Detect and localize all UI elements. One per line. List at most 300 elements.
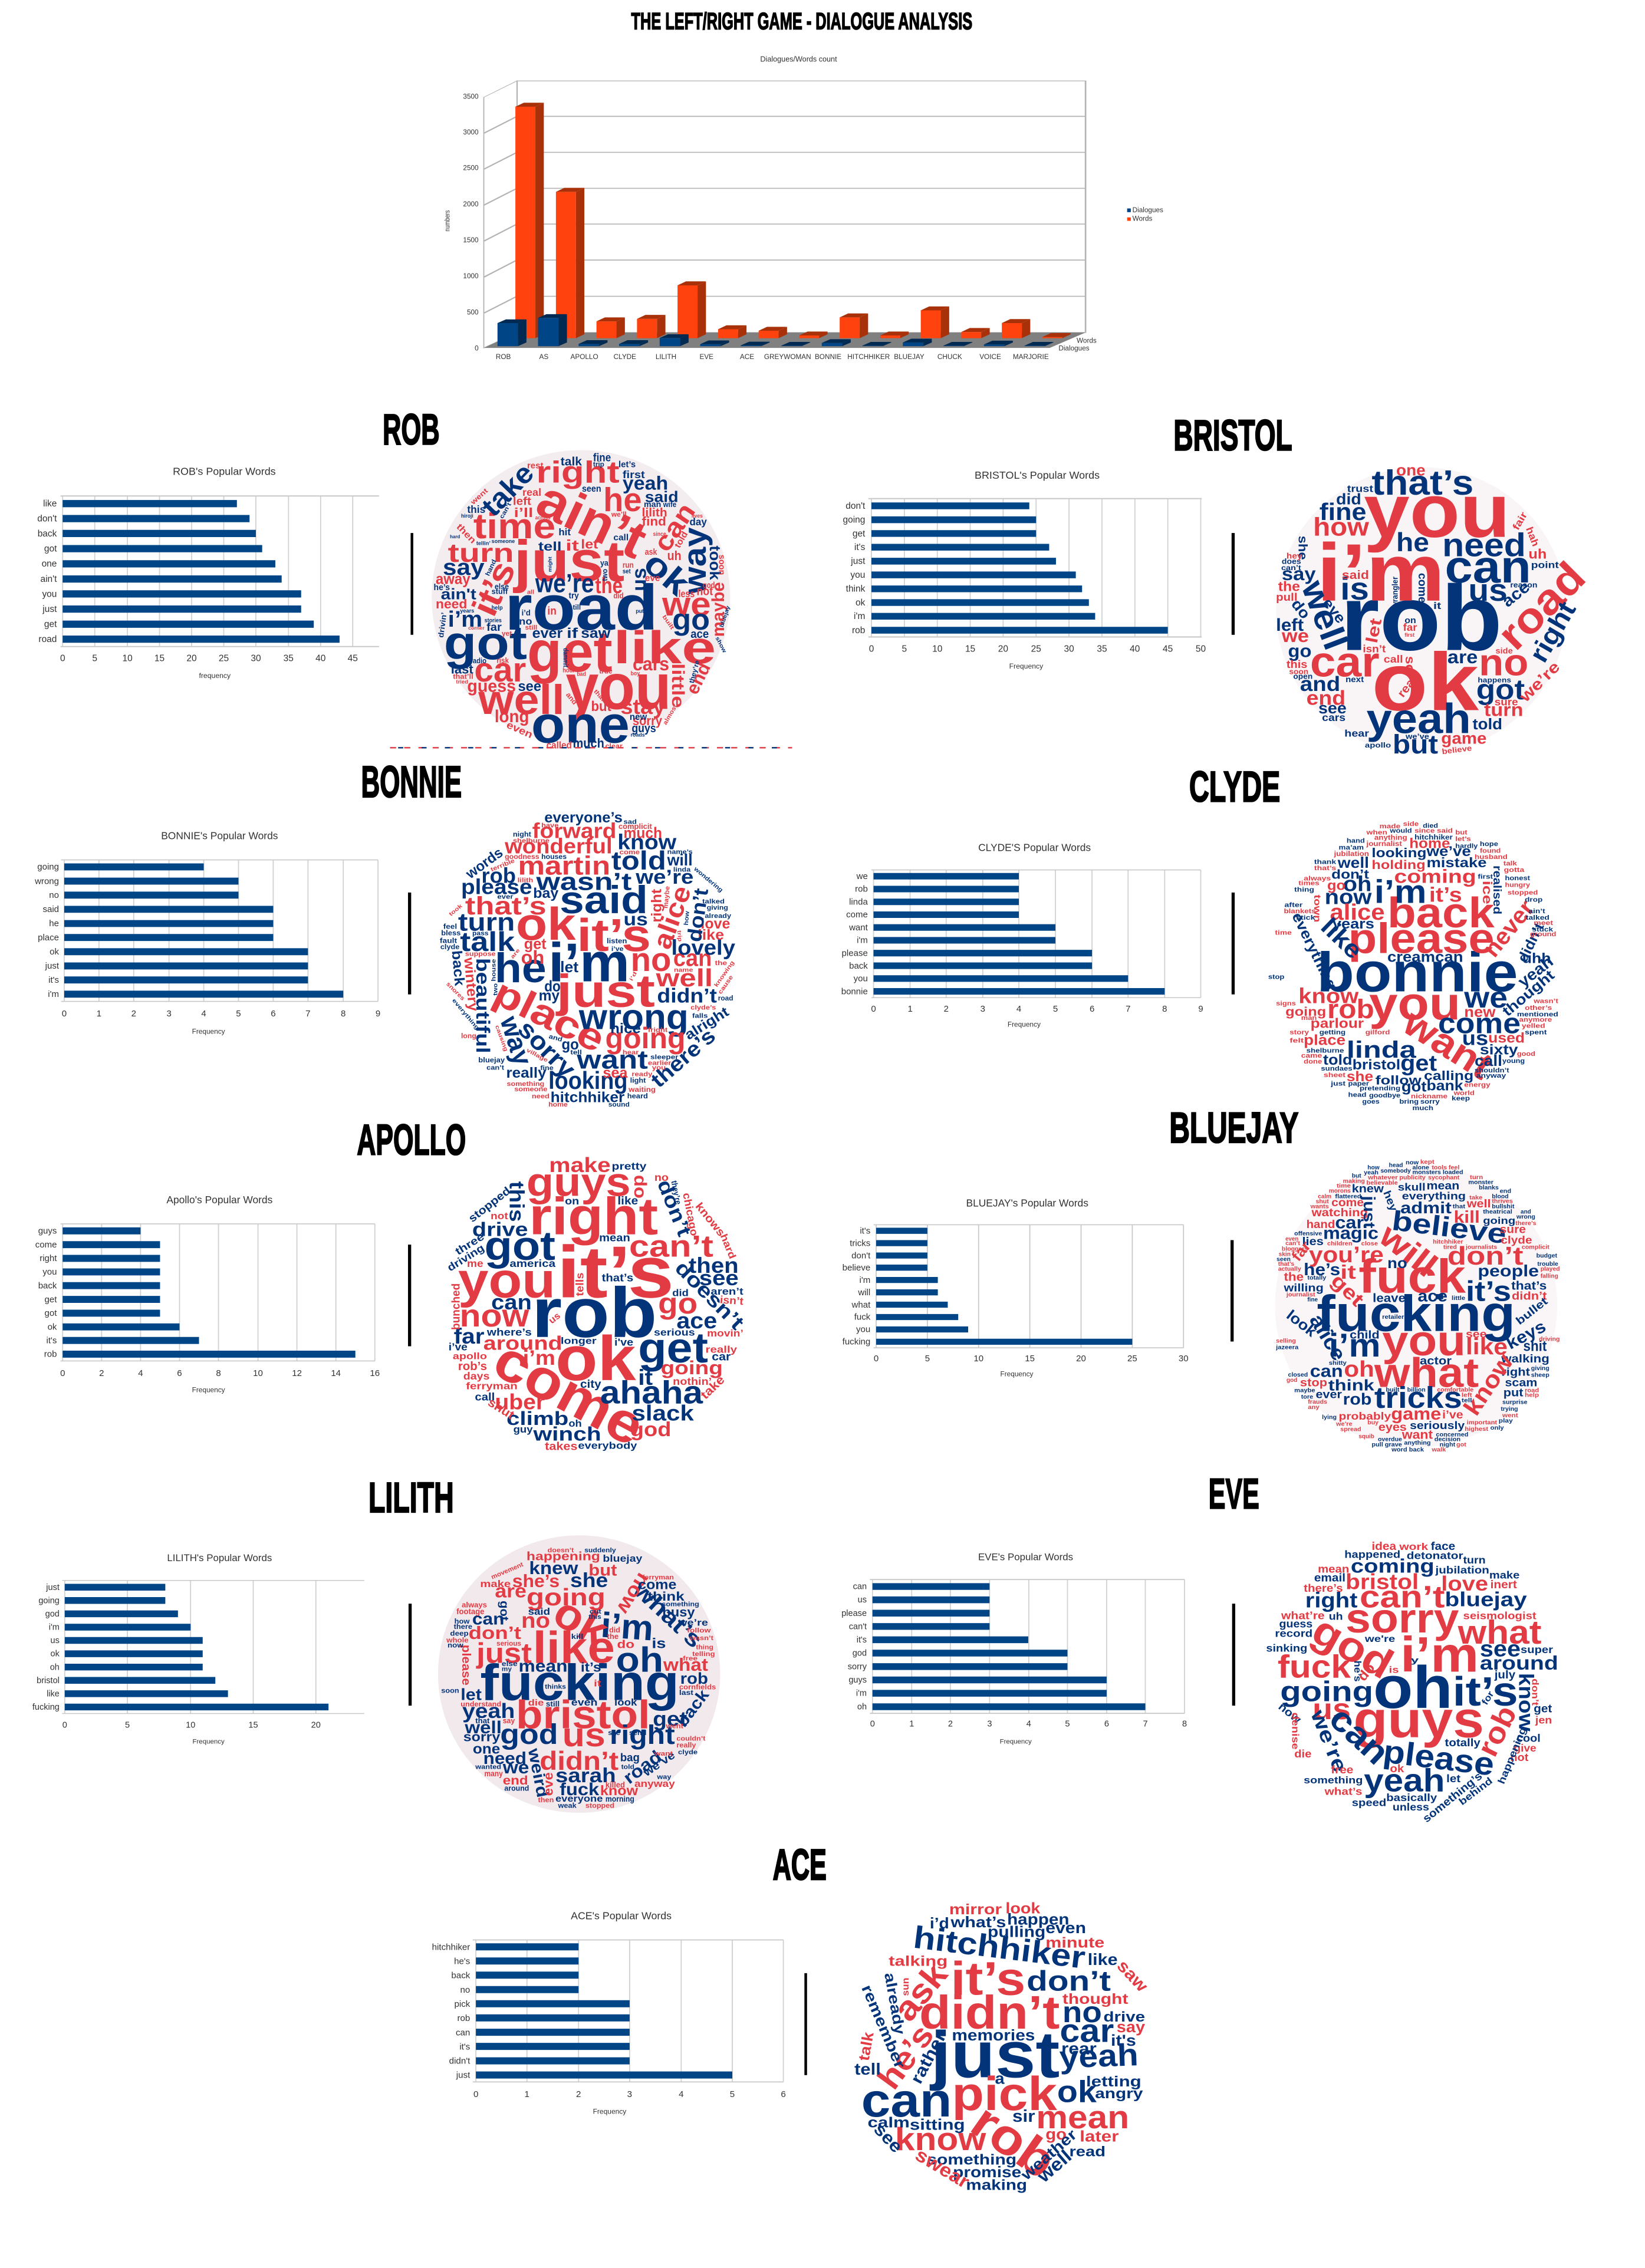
word cloud: ROB: day [689, 516, 707, 528]
bar chart: Apollo's popular words: Frequency [192, 1385, 225, 1394]
word cloud: BLUEJAY: mean [1426, 1180, 1459, 1192]
word cloud: BRISTOL: fine [1320, 498, 1367, 525]
word cloud: CLYDE: got [1401, 1079, 1426, 1095]
word cloud: BONNIE: and [548, 1033, 563, 1044]
panel: BRISTOL: BRISTOL [1173, 412, 1292, 460]
word cloud: BLUEJAY: budget [1537, 1252, 1557, 1259]
word cloud: BLUEJAY: frauds [1308, 1398, 1327, 1405]
word cloud: CLYDE: new [1464, 1004, 1496, 1021]
word cloud: ACE: say [1117, 2018, 1145, 2036]
word cloud: CLYDE: you [1369, 977, 1460, 1029]
bar chart: BLUEJAY's popular words: 20 [1076, 1354, 1086, 1364]
word cloud: LILITH: we’re [677, 1617, 708, 1628]
bar chart: BONNIE's popular words: 8 [341, 1009, 346, 1019]
bar chart: BRISTOL's popular words: ok [856, 598, 866, 608]
panel: overview chart [443, 8, 1163, 361]
word cloud: CLYDE: shouldn’t [1475, 1067, 1509, 1074]
word cloud: BRISTOL: sure [1495, 696, 1518, 708]
word cloud: ROB: ok [637, 544, 697, 603]
word cloud: ACE: mirror [949, 1901, 1002, 1918]
word cloud: CLYDE: found [1480, 847, 1501, 854]
axis labels: EVE [699, 353, 713, 361]
bar chart: Apollo's popular words: Apollo's Popular Words [166, 1194, 273, 1206]
word cloud: CLYDE: follow [1376, 1073, 1422, 1087]
word cloud: ROB: two [600, 569, 609, 581]
word cloud: BONNIE: really [506, 1065, 547, 1081]
word cloud: BONNIE: words [462, 845, 506, 883]
word cloud: LILITH: anyway [634, 1778, 675, 1789]
word cloud: BONNIE: tell [570, 1049, 582, 1056]
axis labels: Dialogues [1058, 344, 1090, 352]
word cloud: BLUEJAY: squib [1358, 1433, 1374, 1440]
word cloud: BONNIE: beautiful [472, 958, 494, 1054]
bar chart: ROB's popular words: just [42, 604, 57, 614]
word cloud: BONNIE: know [617, 830, 677, 854]
word cloud: BONNIE: looking [548, 1067, 627, 1094]
word cloud: ROB: much [573, 736, 604, 750]
word cloud: BONNIE: listen [607, 937, 627, 945]
word cloud: LILITH: suddenly [584, 1546, 616, 1554]
word cloud: BLUEJAY: you [1382, 1317, 1466, 1365]
word cloud: ROB: risk [496, 656, 509, 664]
word cloud: BLUEJAY: important [1467, 1419, 1497, 1426]
word cloud: BLUEJAY: blanks [1479, 1184, 1499, 1191]
word cloud: ROB: across [535, 515, 551, 521]
word cloud: ACE: sir [1012, 2106, 1035, 2125]
word cloud: BONNIE: martin [518, 851, 610, 881]
word cloud: LILITH: everyone [555, 1793, 603, 1804]
word cloud: CLYDE: let’s [1455, 835, 1471, 842]
word cloud: LILITH: still [546, 1700, 560, 1708]
word cloud: CLYDE: calling [1424, 1068, 1473, 1083]
bar chart: BRISTOL's popular words: 40 [1130, 644, 1140, 654]
word cloud: EVE: uh [1329, 1610, 1343, 1622]
bar chart: ROB's popular words: back [38, 529, 57, 539]
bar series: Words [515, 103, 1071, 338]
word cloud: BLUEJAY: comfortable [1437, 1386, 1473, 1393]
bar chart: ACE's popular words: 5 [730, 2089, 735, 2099]
word cloud: APOLLO: me [467, 1258, 483, 1269]
bar chart: BRISTOL's popular words: i'm [854, 611, 865, 621]
word cloud: BONNIE: alice [647, 882, 697, 953]
word cloud: BONNIE: suppose [465, 950, 496, 957]
word cloud: BLUEJAY: that’s [1278, 1260, 1294, 1267]
word cloud: APOLLO: ferryman [466, 1381, 518, 1391]
bar chart: BLUEJAY's popular words: Frequency [1000, 1370, 1034, 1378]
bar chart: LILITH's popular words: i'm [49, 1623, 60, 1632]
bar chart: BLUEJAY's popular words: fucking [843, 1337, 870, 1347]
word cloud: CLYDE: back [1387, 888, 1495, 936]
axis labels: 3000 [463, 129, 479, 136]
word cloud: EVE: now [1276, 1701, 1304, 1726]
word cloud: BONNIE: heard [627, 1092, 648, 1100]
word cloud: BONNIE: that’s [465, 892, 547, 920]
axis labels: 0 [475, 344, 479, 352]
word cloud: EVE: he’s [1352, 1661, 1363, 1682]
word cloud: BRISTOL: hah [1524, 525, 1541, 548]
word cloud: ROB: true [599, 666, 613, 675]
word cloud: APOLLO: around [483, 1332, 562, 1354]
word cloud: EVE: please [1381, 1733, 1496, 1783]
word cloud: LILITH: sarah [555, 1765, 616, 1787]
bar chart: Apollo's popular words: 2 [99, 1368, 104, 1378]
word cloud: BLUEJAY: complicit [1522, 1243, 1549, 1250]
word cloud: ACE [854, 1900, 1152, 2193]
word cloud: APOLLO [445, 1153, 749, 1458]
word cloud: CLYDE: bristol [1353, 1056, 1400, 1072]
word cloud: APOLLO: takes [545, 1440, 578, 1453]
word cloud: ROB: maybe [709, 582, 728, 637]
bar chart: BONNIE's popular words: 6 [271, 1009, 276, 1019]
word cloud: BONNIE: giving [707, 904, 728, 911]
word cloud: ROB: ever [532, 626, 563, 641]
word cloud: EVE: face [1431, 1540, 1455, 1553]
bar chart: LILITH's popular words: LILITH's Popular Words [167, 1552, 272, 1563]
word cloud: ACE: car [1060, 2012, 1114, 2049]
panel: EVE: EVE [1209, 1470, 1259, 1518]
word cloud: BLUEJAY: lying [1322, 1414, 1337, 1420]
separator [408, 893, 411, 995]
word cloud: ACE: angry [1095, 2086, 1143, 2102]
word cloud: APOLLO: oh [568, 1418, 582, 1429]
word cloud: EVE: don’t [1530, 1678, 1540, 1706]
word cloud: CLYDE: time [1275, 929, 1292, 936]
word cloud: BRISTOL: can’t [1281, 564, 1301, 572]
word cloud: BLUEJAY: seriously [1410, 1419, 1465, 1431]
word cloud: LILITH: went [666, 1721, 683, 1730]
word cloud: CLYDE: felt [1289, 1037, 1304, 1044]
word cloud: BONNIE: clyde [440, 943, 460, 951]
word cloud: ROB: tried [456, 679, 468, 686]
word cloud: ROB: last [451, 662, 473, 676]
word cloud: ACE: talk [855, 2030, 877, 2062]
word cloud: ACE: hitchhiker [912, 1920, 1087, 1976]
word cloud: ROB: he [603, 482, 642, 519]
text: falling [1541, 1272, 1558, 1279]
word cloud: BONNIE: houses [541, 852, 567, 861]
word cloud: ROB: years [460, 608, 474, 614]
word cloud: CLYDE: yelled [1522, 1022, 1545, 1030]
word cloud: EVE: y [1411, 1656, 1419, 1665]
word cloud: ROB: wife [663, 500, 676, 509]
word cloud: ACE: i’d [930, 1915, 949, 1932]
word cloud: CLYDE: linda [1347, 1037, 1416, 1063]
word cloud: ROB: call [613, 534, 629, 543]
bar chart: BONNIE's popular words: said [42, 904, 59, 914]
bar chart: ACE's popular words: 6 [781, 2089, 786, 2099]
bar chart: ROB's popular words: 35 [284, 654, 294, 664]
word cloud: BLUEJAY: right [1501, 1365, 1530, 1378]
word cloud: ROB: well [478, 676, 565, 723]
word cloud: APOLLO: winch [533, 1423, 601, 1445]
word cloud: CLYDE: everything [1288, 910, 1340, 992]
word cloud: ACE: minute [1045, 1934, 1104, 1951]
word cloud: BRISTOL: real [1395, 674, 1420, 700]
word cloud: BONNIE: forward [532, 819, 617, 843]
bar chart: BLUEJAY's popular words: 5 [925, 1354, 930, 1364]
bar chart: ROB's popular words [37, 466, 379, 680]
word cloud: ROB: try [569, 591, 579, 601]
word cloud: BONNIE: back [449, 950, 468, 987]
word cloud: LILITH: way [657, 1773, 672, 1780]
word cloud: CLYDE: parlour [1311, 1015, 1364, 1031]
word cloud: EVE: happened [1344, 1549, 1400, 1560]
panel: CLYDE [841, 762, 1558, 1112]
word cloud: ROB: trip [593, 460, 604, 469]
word cloud: ROB: find [642, 515, 666, 529]
bar chart: CLYDE's popular words: you [854, 974, 868, 984]
word cloud: BLUEJAY: knew [1352, 1182, 1384, 1195]
word cloud: BRISTOL: on [1404, 615, 1416, 625]
bar chart: ACE's popular words: just [456, 2071, 471, 2081]
word cloud: BONNIE: you [652, 1064, 666, 1071]
word cloud: LILITH: weird [524, 1746, 552, 1799]
word cloud: BLUEJAY: tired [1443, 1243, 1457, 1250]
word cloud: LILITH: send [629, 1729, 646, 1737]
word cloud: APOLLO: that’s [602, 1272, 633, 1284]
word cloud: ACE: no [1062, 1996, 1102, 2029]
word cloud: CLYDE: us [1462, 1026, 1488, 1049]
word cloud: APOLLO: can’t [629, 1229, 713, 1263]
bar chart: CLYDE's popular words: 0 [871, 1004, 876, 1014]
word cloud: BRISTOL: well [1294, 575, 1355, 655]
axis labels: 1500 [463, 236, 479, 244]
word cloud: ROB: real [522, 486, 541, 498]
word cloud: LILITH: one [473, 1741, 500, 1757]
word cloud: BLUEJAY: making [1343, 1177, 1365, 1184]
word cloud: ACE: weather [1016, 2125, 1080, 2184]
word cloud: LILITH: don’t [469, 1623, 521, 1643]
bar chart: Apollo's popular words: 6 [177, 1368, 182, 1378]
word cloud: LILITH: know [600, 1783, 639, 1798]
word cloud: LILITH: killed [606, 1780, 625, 1789]
word cloud: LILITH: else [502, 1660, 518, 1668]
word cloud: ROB: that’ll [453, 673, 473, 681]
word cloud: BRISTOL: said [1342, 568, 1369, 582]
word cloud: ROB: run [623, 561, 634, 570]
word cloud: BONNIE: ready [631, 1071, 653, 1078]
word cloud: CLYDE: spent [1525, 1029, 1547, 1036]
word cloud: BLUEJAY: surprise [1502, 1398, 1528, 1405]
word cloud: APOLLO: days [463, 1370, 489, 1382]
word cloud: ROB: time [473, 506, 555, 546]
word cloud: ROB: can [647, 498, 701, 557]
word cloud: EVE: behind [1457, 1775, 1495, 1808]
word cloud: CLYDE: we [1464, 981, 1508, 1014]
bar chart: BLUEJAY's popular words: it's [860, 1226, 870, 1236]
bar chart: Apollo's popular words: come [35, 1240, 57, 1250]
word cloud: BLUEJAY [1275, 1158, 1560, 1453]
word cloud: BLUEJAY: night [1440, 1441, 1455, 1448]
word cloud: BRISTOL: next [1345, 674, 1364, 684]
separator [409, 1604, 412, 1706]
bar chart: EVE's popular words: sorry [848, 1663, 867, 1672]
word cloud: APOLLO: it [638, 1365, 653, 1390]
word cloud: CLYDE: since said [1414, 827, 1453, 835]
word cloud: LILITH: please [459, 1645, 472, 1686]
word cloud: BLUEJAY: clyde [1501, 1234, 1532, 1246]
word cloud: CLYDE: done [1304, 1058, 1322, 1065]
word cloud: ROB: even [505, 719, 535, 740]
bar chart: BRISTOL's popular words: think [846, 584, 866, 594]
word cloud: APOLLO: guys [527, 1160, 631, 1204]
word cloud: CLYDE: wasn’t [1534, 998, 1558, 1005]
word cloud: ACE: it's [1111, 2032, 1136, 2049]
axis labels: 3500 [463, 93, 479, 101]
word cloud: ACE: sitting [910, 2116, 965, 2133]
word cloud: BLUEJAY: shitty [1329, 1360, 1347, 1366]
word cloud: BLUEJAY: car [1335, 1213, 1364, 1232]
word cloud: CLYDE: don’t [1331, 867, 1369, 881]
word cloud: LILITH: bluejay [603, 1553, 643, 1564]
bar chart: ROB's popular words: 0 [60, 654, 65, 664]
word cloud: ROB: rest [527, 461, 544, 470]
bar chart: ACE's popular words: 3 [627, 2089, 632, 2099]
word cloud: BONNIE: ever [497, 893, 514, 900]
word cloud: LILITH: wasn’t [689, 1634, 713, 1642]
word cloud: ROB: i’ll [514, 505, 533, 520]
word cloud: LILITH: us [562, 1716, 606, 1753]
word cloud: ACE: swear [912, 2144, 973, 2193]
axis labels: APOLLO [571, 353, 598, 361]
word cloud: BLUEJAY: wrong [1516, 1213, 1535, 1220]
word cloud: BLUEJAY: see [1466, 1328, 1486, 1340]
word cloud: BONNIE: oh [521, 946, 544, 968]
bar chart: BRISTOL's popular words: 5 [902, 644, 907, 654]
bar chart: BRISTOL's popular words [843, 469, 1206, 670]
word cloud: LILITH: look [614, 1697, 637, 1708]
word cloud: ROB: radio [471, 656, 486, 665]
word cloud: BONNIE: everyone’s [544, 810, 623, 826]
word cloud: LILITH: eve [541, 1772, 556, 1796]
bar chart: ROB's popular words: 25 [219, 654, 229, 664]
bar chart: BONNIE's popular words [34, 829, 380, 1036]
word cloud: LILITH: ok [545, 1586, 617, 1657]
bar chart: ROB's popular words: 15 [154, 654, 164, 664]
word cloud: APOLLO: hard [718, 1232, 738, 1260]
word cloud: ROB: show [714, 636, 728, 654]
word cloud: ACE: yeah [1059, 2037, 1139, 2075]
word cloud: ROB: still [525, 624, 537, 631]
axis labels: VOICE [979, 353, 1001, 361]
axis labels: 2000 [463, 200, 479, 208]
word cloud: APOLLO: i’m [523, 1347, 555, 1370]
word cloud: BONNIE: pass [472, 930, 489, 937]
word cloud: CLYDE: rob [1327, 994, 1374, 1024]
word cloud: LILITH: even [571, 1697, 597, 1708]
text: trouble [1537, 1260, 1558, 1267]
word cloud: BLUEJAY: little [1452, 1295, 1465, 1301]
word cloud: ROB: it’s [464, 555, 523, 622]
word cloud: APOLLO: serious [654, 1327, 695, 1338]
word cloud: APOLLO: nothin’ [673, 1375, 712, 1387]
word cloud: LILITH: think [647, 1590, 685, 1604]
word cloud: BONNIE: told [611, 846, 666, 875]
word cloud: LILITH: bag [620, 1752, 640, 1764]
bar chart: LILITH's popular words: like [47, 1689, 60, 1698]
word cloud: APOLLO: you [458, 1253, 555, 1308]
word cloud: ACE: drive [1103, 2009, 1145, 2025]
word cloud: LILITH: say [503, 1716, 515, 1725]
word cloud: ACE: even [1045, 1919, 1086, 1937]
word cloud: CLYDE: like [1315, 912, 1368, 964]
word cloud: CLYDE: husband [1475, 854, 1508, 861]
word cloud: CLYDE: shelburne [1307, 1047, 1344, 1054]
word cloud: ACE: go [1045, 2125, 1067, 2143]
word cloud: BONNIE: sound [608, 1101, 630, 1108]
word cloud: CLYDE [1268, 821, 1558, 1112]
word cloud: BONNIE: snores [445, 981, 466, 1002]
word cloud: BLUEJAY: journalists [1465, 1243, 1497, 1250]
word cloud: ACE: read [1069, 2144, 1106, 2160]
word cloud: BLUEJAY: selling [1276, 1337, 1296, 1344]
word cloud: BLUEJAY: fuck [1358, 1250, 1466, 1303]
panel: BONNIE: BONNIE [361, 757, 462, 807]
axis labels: 500 [467, 308, 479, 316]
word cloud: EVE: we’re [1306, 1706, 1352, 1776]
word cloud: BRISTOL: does [1282, 557, 1301, 565]
word cloud: ROB: ain’t [528, 469, 656, 570]
text: driving [1539, 1335, 1560, 1342]
word cloud: ROB: hand [484, 558, 498, 577]
word cloud: BLUEJAY: bullshit [1492, 1203, 1514, 1210]
axis labels: 2500 [463, 164, 479, 172]
word cloud: ACE: didn’t [919, 1986, 1060, 2039]
word cloud: CLYDE: world [1453, 1089, 1475, 1097]
bar chart: Apollo's popular words: 14 [331, 1368, 341, 1378]
bar chart: BONNIE's popular words: 2 [131, 1009, 136, 1019]
word cloud: ROB: cars [633, 653, 669, 674]
word cloud: CLYDE: hand [1347, 837, 1365, 845]
word cloud: CLYDE: ground [1530, 931, 1556, 938]
word cloud: BONNIE: nice [610, 1021, 641, 1036]
word cloud: BLUEJAY: help [1525, 1391, 1539, 1398]
word cloud: LILITH: what’s [627, 1576, 707, 1653]
bar chart: CLYDE's popular words: 1 [907, 1004, 913, 1014]
bar chart: BONNIE's popular words: 0 [62, 1009, 67, 1019]
word cloud: EVE: god [1304, 1607, 1401, 1688]
word cloud: BLUEJAY: think [1328, 1377, 1374, 1394]
word cloud: BLUEJAY: now [1406, 1159, 1419, 1166]
word cloud: APOLLO: can [491, 1290, 532, 1314]
word cloud: APOLLO: do [630, 1175, 650, 1199]
bar chart: CLYDE's popular words: want [848, 923, 868, 933]
bar chart: BLUEJAY's popular words: 25 [1127, 1354, 1137, 1364]
word cloud: LILITH: got [497, 1601, 510, 1621]
word cloud: EVE: mean [1318, 1563, 1349, 1575]
word cloud: LILITH: last [679, 1688, 693, 1697]
bar chart: BONNIE's popular words: ok [50, 947, 59, 957]
word cloud: BRISTOL: uh [1528, 547, 1547, 562]
word cloud: ROB: talk [561, 455, 582, 468]
word cloud: APOLLO: pretty [612, 1160, 647, 1172]
word cloud: ROB: corner [468, 625, 485, 631]
word cloud: ROB: right [536, 455, 620, 489]
bar chart: ACE's popular words: 2 [576, 2089, 581, 2099]
word cloud: ROB: we [662, 586, 711, 623]
word cloud: ROB: long [495, 707, 529, 726]
word cloud: EVE: ok [1390, 1763, 1404, 1775]
word cloud: APOLLO: no [654, 1171, 669, 1183]
word cloud: BLUEJAY: what [1374, 1349, 1479, 1396]
word cloud: BRISTOL: apollo [1365, 741, 1391, 749]
word cloud: LILITH: come [638, 1577, 676, 1592]
word cloud: LILITH: just [476, 1638, 532, 1669]
panel: BONNIE [34, 757, 736, 1108]
word cloud: EVE: what [1458, 1613, 1542, 1651]
word cloud: BLUEJAY: shut [1316, 1198, 1329, 1204]
word cloud: EVE: do [1354, 1660, 1378, 1684]
